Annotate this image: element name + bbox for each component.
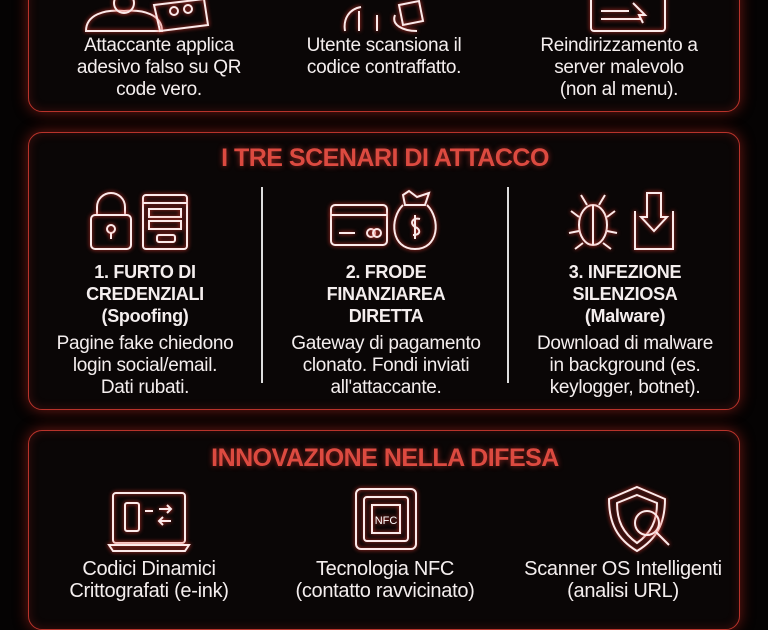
icon: malicious server page xyxy=(586,0,670,36)
text: step 1: Attaccante applica xyxy=(84,35,234,56)
heading: defense: INNOVAZIONE NELLA DIFESA xyxy=(211,444,559,472)
title: scenario 3: 3. INFEZIONE xyxy=(569,262,681,282)
scenario 3 xyxy=(537,262,713,398)
text: scenario 2: clonato. Fondi inviati xyxy=(303,355,469,376)
text: scenario 1: login social/email. xyxy=(73,355,217,376)
title: scenario 2: DIRETTA xyxy=(349,306,423,326)
title: scenario 2 xyxy=(327,262,446,326)
scenario 1 xyxy=(57,262,233,398)
text: step 3: server malevolo xyxy=(554,57,684,78)
panel: attack steps xyxy=(28,0,740,112)
title: scenario 1: 1. FURTO DI xyxy=(94,262,196,282)
text: scenario 1: Pagine fake chiedono xyxy=(57,333,233,354)
icon: bug and download xyxy=(566,188,678,254)
title: scenario 2: 2. FRODE xyxy=(346,262,426,282)
text: defense 1: Crittografati (e-ink) xyxy=(69,580,229,602)
icon: card and money bag xyxy=(326,187,440,254)
title: scenario 3: SILENZIOSA xyxy=(572,284,678,304)
text: step 2 xyxy=(307,35,461,78)
text: defense 3 xyxy=(524,558,722,602)
panel: three attack scenarios xyxy=(28,132,740,410)
title: scenario 3 xyxy=(569,262,681,326)
icon: NFC chip: NFC xyxy=(375,515,397,527)
icon: laptop dynamic codes xyxy=(105,488,193,556)
text: scenario 2: all'attaccante. xyxy=(330,377,442,398)
icon: user scanning xyxy=(340,0,427,36)
text: scenario 1 xyxy=(57,333,233,398)
text: step 1 xyxy=(77,35,241,100)
text: defense 3: (analisi URL) xyxy=(567,580,679,602)
text: scenario 3 xyxy=(537,333,713,398)
text: defense 1 xyxy=(69,558,229,602)
icon: shield scanner xyxy=(604,483,672,555)
title: scenario 3: (Malware) xyxy=(585,306,665,326)
text: defense 2: Tecnologia NFC xyxy=(316,558,454,580)
title: scenario 1: CREDENZIALI xyxy=(86,284,204,304)
icon: NFC chip xyxy=(352,484,420,554)
text: scenario 2: Gateway di pagamento xyxy=(291,333,481,354)
icon: attacker with sticker xyxy=(82,0,212,36)
text: defense 3: Scanner OS Intelligenti xyxy=(524,558,722,580)
title: scenario 1: (Spoofing) xyxy=(102,306,188,326)
title: scenario 2: FINANZIAREA xyxy=(327,284,445,304)
text: scenario 2 xyxy=(291,333,481,398)
text: scenario 3: in background (es. xyxy=(550,355,700,376)
panel: defense innovation xyxy=(28,430,740,630)
text: step 3: (non al menu). xyxy=(560,79,678,100)
text: scenario 1: Dati rubati. xyxy=(101,377,189,398)
text: scenario 3: keylogger, botnet). xyxy=(550,377,700,398)
text: defense 1: Codici Dinamici xyxy=(82,558,216,580)
text: defense 2 xyxy=(295,558,475,602)
text: defense 2: (contatto ravvicinato) xyxy=(295,580,475,602)
text: step 2: Utente scansiona il xyxy=(307,35,461,56)
icon: lock and login xyxy=(86,188,192,254)
heading: scenarios: I TRE SCENARI DI ATTACCO xyxy=(221,144,549,172)
scenario 2 xyxy=(291,262,481,398)
title: scenario 1 xyxy=(86,262,204,326)
text: step 1: code vero. xyxy=(116,79,202,100)
text: step 3: Reindirizzamento a xyxy=(540,35,698,56)
text: step 2: codice contraffatto. xyxy=(307,57,461,78)
text: step 1: adesivo falso su QR xyxy=(77,57,241,78)
text: step 3 xyxy=(540,35,698,100)
text: scenario 3: Download di malware xyxy=(537,333,713,354)
